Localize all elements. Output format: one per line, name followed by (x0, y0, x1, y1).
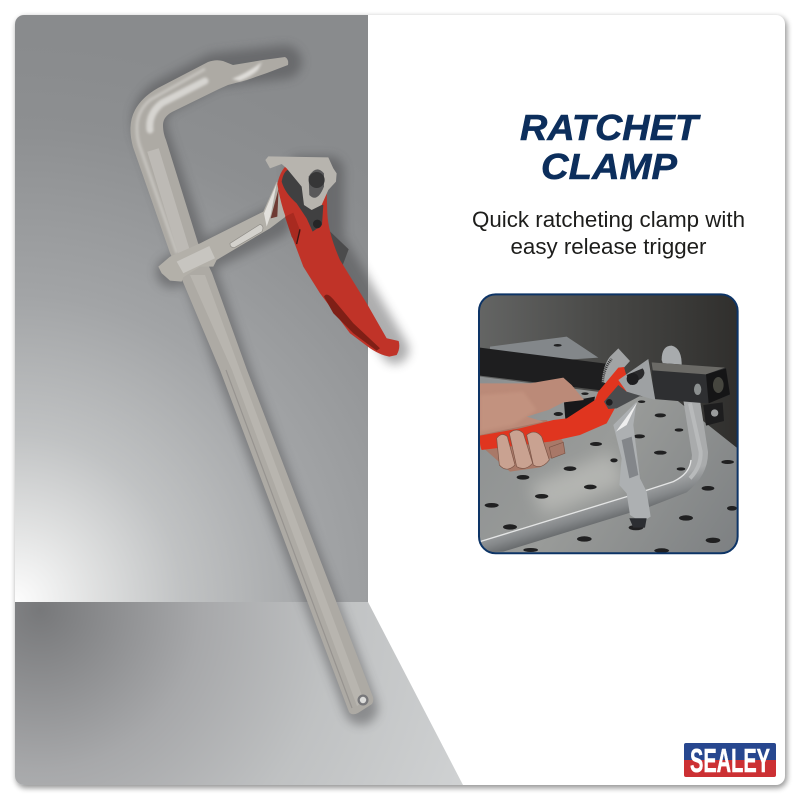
bar highlight (480, 460, 691, 542)
black rear lever (564, 397, 595, 419)
bar end rivet (358, 694, 368, 706)
arm face (153, 150, 185, 255)
slider tip (264, 183, 277, 227)
description line 1: Quick ratcheting clamp with (472, 207, 745, 232)
lock slot (627, 368, 644, 385)
upright rim highlight (137, 69, 205, 253)
bar groove (226, 370, 352, 708)
dark inner mechanism (282, 169, 323, 232)
ratchet teeth (603, 359, 612, 383)
top jaw tab (662, 346, 682, 367)
bar face highlight (190, 275, 364, 706)
hand shade (483, 396, 528, 428)
description line 2: easy release trigger (510, 234, 707, 259)
lock plate (618, 359, 655, 400)
sliding jaw in photo (613, 402, 651, 522)
slider highlight (177, 246, 215, 273)
black beam (480, 348, 612, 392)
heading line 1: RATCHET (520, 107, 701, 148)
table top (480, 377, 738, 553)
heading line 2: CLAMP (541, 146, 678, 187)
red handle in photo (480, 367, 628, 450)
red handle (277, 166, 399, 357)
lock pin (627, 373, 639, 385)
clamp photo: ratchet clamp product (130, 57, 399, 714)
photo border (479, 294, 738, 553)
tube end (706, 368, 730, 403)
dark link (604, 385, 640, 409)
upright highlight (690, 403, 701, 478)
clamp frame: arm and bar (130, 57, 373, 714)
panel: grey floor (15, 602, 463, 785)
arm tip jaw (232, 62, 262, 81)
light patch on table (530, 452, 627, 515)
trigger (285, 213, 301, 245)
jaw slot (622, 437, 638, 478)
rear table (490, 336, 598, 360)
clamp shadow (149, 62, 395, 708)
tube end hole (713, 377, 724, 393)
square tube (652, 363, 703, 403)
photo background (480, 295, 737, 448)
handle slot (324, 295, 380, 351)
lower palm (480, 420, 565, 472)
sliding jaw and handle (158, 156, 399, 357)
black rear lever (325, 227, 349, 271)
logo blue top (684, 743, 776, 760)
tube bracket (703, 402, 724, 426)
pin slot (309, 169, 324, 198)
head top plate (265, 156, 337, 210)
lower pin (313, 220, 322, 228)
heading (520, 107, 701, 187)
corner highlight (150, 81, 205, 130)
slider body (158, 182, 290, 282)
pin (309, 172, 325, 188)
hand back (480, 378, 584, 435)
tube top face (652, 362, 725, 374)
panel: grey wall (15, 15, 368, 602)
logo red bottom (684, 760, 776, 777)
inset photo: clamp in use (479, 294, 738, 553)
jaw foot (629, 518, 647, 528)
clamp frame in photo: bar and upright (480, 400, 708, 553)
ratchet plate (602, 348, 630, 385)
slider slot (230, 224, 263, 247)
lower rivet (606, 399, 613, 406)
jaw bright tip (616, 402, 637, 432)
description text (472, 207, 745, 259)
table holes (485, 344, 737, 553)
logo: Sealey (684, 742, 776, 779)
tube side hole (694, 384, 701, 395)
fingers (497, 430, 565, 469)
